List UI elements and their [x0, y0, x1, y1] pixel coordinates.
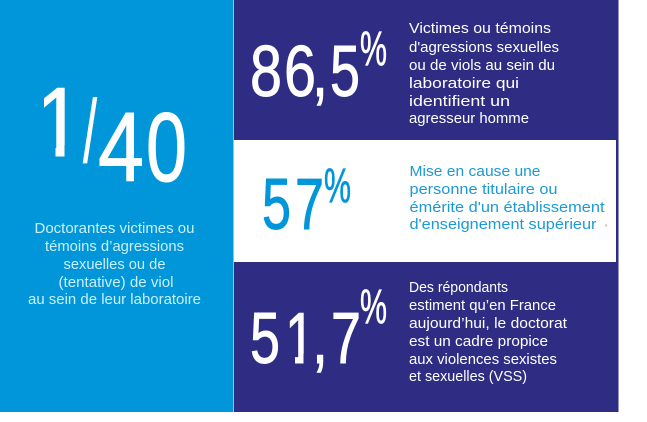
text: cadre propice	[409, 279, 568, 385]
panel: left blue	[0, 0, 234, 412]
figure: 86,5%: 5	[330, 32, 360, 112]
text: mise en cause: Mise en cause une	[410, 163, 540, 180]
text: cadre propice: Des répondants	[409, 279, 508, 296]
figure: 86,5%: 8	[250, 32, 282, 112]
text: mise en cause	[410, 163, 605, 233]
figure: 51,7%: 7	[331, 299, 361, 379]
text: mise en cause: émérite d'un établissement	[410, 199, 605, 216]
big figure: 1/40: 4	[98, 92, 144, 202]
stat: 86,5%	[250, 20, 559, 127]
figure: 51,7%: %	[360, 281, 387, 334]
big figure: 1/40	[30, 67, 187, 202]
text: agresseur homme: identifient un	[409, 93, 510, 110]
text: agresseur homme: ou de viols au sein du	[409, 57, 555, 74]
big figure: 1/40: /	[83, 81, 97, 181]
figure: 51,7%: 1	[285, 299, 315, 379]
text: doctorantes description: sexuelles ou de	[64, 256, 166, 273]
text: agresseur homme: Victimes ou témoins	[409, 20, 551, 37]
big figure: 1/40: 0	[146, 92, 187, 202]
figure: 57%	[262, 160, 351, 245]
text: doctorantes description: Doctorantes victimes ou	[34, 220, 194, 237]
figure: 57%: 5	[262, 165, 291, 245]
figure: 86,5%: ,	[312, 32, 328, 112]
figure: 57%: 7	[295, 165, 324, 245]
panel: white stat 57%	[234, 140, 616, 262]
figure: 51,7%	[250, 281, 387, 379]
figure: 86,5%: 6	[284, 32, 316, 112]
figure: 86,5%	[250, 23, 387, 112]
text: mise en cause: d'enseignement supérieur	[410, 216, 596, 233]
panel: right dark background	[234, 0, 618, 412]
text: cadre propice: et sexuelles (VSS)	[409, 368, 527, 385]
stat: 51,7%	[250, 279, 568, 385]
big figure: 1/40: 1	[36, 67, 82, 177]
text: cadre propice: aux violences sexistes	[409, 351, 557, 368]
text: agresseur homme: agresseur homme	[409, 110, 529, 127]
text: cadre propice: aujourd’hui, le doctorat	[409, 315, 568, 332]
text: agresseur homme: laboratoire qui	[409, 75, 519, 92]
text: mise en cause: personne titulaire ou	[410, 181, 558, 198]
figure: 51,7%: 5	[250, 299, 280, 379]
text: doctorantes description	[28, 220, 201, 308]
figure: 86,5%: %	[360, 23, 387, 76]
text: doctorantes description: témoins d’agressions	[45, 238, 184, 255]
text: doctorantes description: au sein de leur laboratoire	[28, 291, 201, 308]
text: agresseur homme	[409, 20, 559, 127]
figure: 57%: %	[324, 160, 351, 213]
figure: 51,7%: ,	[312, 299, 328, 379]
text: doctorantes description: (tentative) de viol	[58, 274, 174, 291]
text: cadre propice: estiment qu’en France	[409, 297, 556, 314]
text: cadre propice: est un cadre propice	[409, 333, 548, 350]
text: agresseur homme: d'agressions sexuelles	[409, 39, 559, 56]
